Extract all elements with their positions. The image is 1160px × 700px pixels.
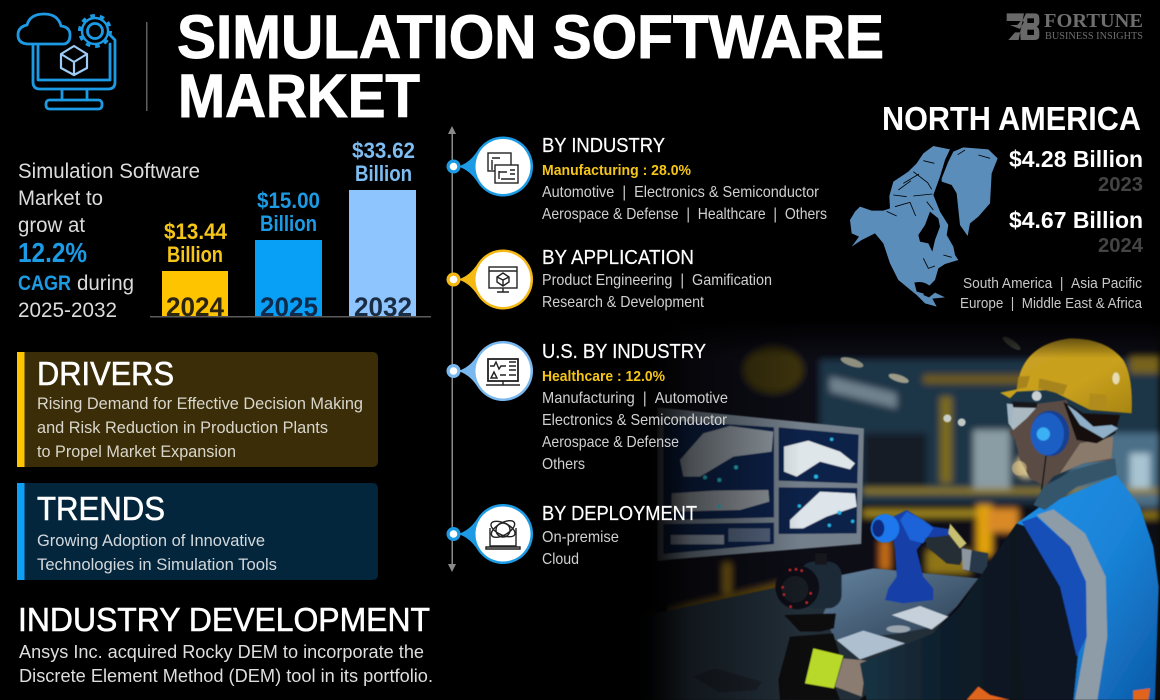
camera sensor: [775, 553, 842, 632]
text block: U.S. by industry: Healthcare : 12.0%: [542, 368, 665, 385]
icon: monitor with cloud, gear and cube: [18, 14, 115, 109]
lower glove and wrist: [778, 633, 840, 700]
header divider: [146, 22, 148, 111]
panel: trends: Growing Adoption of Innovative: [37, 531, 265, 550]
industry development: Ansys Inc. acquired Rocky DEM to incorporate the: [19, 641, 424, 662]
desk and keyboards: [640, 510, 1027, 700]
regional values: 2024: [1098, 235, 1144, 257]
industry development: Discrete Element Method (DEM) tool in its portfolio.: [19, 665, 433, 686]
segment marker: by industry: [446, 136, 533, 196]
text block: by deployment: BY DEPLOYMENT: [542, 503, 697, 525]
other regions: South America | Asia Pacific: [963, 275, 1142, 292]
text block: U.S. by industry: Aerospace & Defense: [542, 434, 679, 451]
text block: by application: BY APPLICATION: [542, 247, 694, 269]
vest: [1017, 475, 1159, 700]
panel: trends: [17, 483, 378, 580]
bar 2024: [162, 219, 228, 322]
ceiling lights: [840, 356, 864, 368]
text block: by application: [542, 247, 772, 311]
bar 2032: 2032: [354, 292, 412, 322]
jacket: [860, 520, 1027, 700]
logo: Fortune Business Insights: FORTUNE: [1044, 10, 1143, 32]
bar 2032: [349, 138, 416, 322]
head and hard hat: [1000, 338, 1132, 510]
growth text: CAGR: [18, 271, 71, 295]
text block: U.S. by industry: Others: [542, 456, 585, 473]
monitor stand: [655, 561, 667, 624]
text block: by deployment: On-premise: [542, 529, 619, 546]
icon: industrial robots: [488, 153, 518, 183]
other regions: [960, 275, 1143, 312]
panel: trends: TRENDS: [37, 490, 165, 527]
bar 2025: [255, 188, 322, 322]
segment marker: by application: [446, 250, 533, 310]
text block: U.S. by industry: Electronics & Semiconductor: [542, 412, 728, 429]
bar 2024: Billion: [167, 242, 223, 267]
segment marker: U.S. by industry: [446, 341, 533, 401]
regional values: [1009, 146, 1144, 257]
segment marker: by deployment: [446, 504, 533, 564]
text block: U.S. by industry: U.S. BY INDUSTRY: [542, 341, 706, 363]
photo: engineer at simulation workstation: [640, 320, 1160, 700]
regional values: $4.28 Billion: [1009, 146, 1143, 172]
bar 2024: $13.44: [164, 219, 228, 244]
bar chart: market size: [150, 138, 431, 322]
text block: by industry: Aerospace & Defense | Healthcare | Others: [542, 206, 827, 223]
icon: monitor with cube: [489, 267, 517, 292]
bar 2024: 2024: [166, 292, 224, 322]
bar 2032: $33.62: [352, 138, 415, 163]
text block: by deployment: Cloud: [542, 551, 579, 568]
panel: drivers: DRIVERS: [37, 355, 174, 392]
text block: by application: Research & Development: [542, 294, 704, 311]
text block: by industry: Manufacturing : 28.0%: [542, 162, 691, 179]
industry development: [18, 601, 433, 686]
panel: drivers: to Propel Market Expansion: [37, 442, 236, 461]
raised hand: [925, 535, 967, 565]
growth text: [18, 159, 200, 322]
timeline arrow: [448, 126, 456, 572]
logo: Fortune Business Insights: BUSINESS INSIGHTS: [1045, 31, 1143, 42]
industry development: INDUSTRY DEVELOPMENT: [18, 601, 430, 638]
icon: laptop with atom: [486, 517, 520, 549]
icon: dashboard monitor: [486, 359, 520, 385]
panel: drivers: [17, 352, 378, 467]
bar 2025: Billion: [260, 211, 317, 236]
logo mark: [1007, 13, 1039, 40]
text block: U.S. by industry: [542, 341, 728, 473]
growth text: Simulation Software: [18, 159, 200, 183]
panel: trends: Technologies in Simulation Tools: [37, 555, 277, 574]
text block: by deployment: [542, 503, 697, 568]
text block: by industry: Automotive | Electronics & Semiconductor: [542, 184, 820, 201]
text block: U.S. by industry: Manufacturing | Automotive: [542, 390, 728, 407]
text block: by application: Product Engineering | Gamification: [542, 272, 772, 289]
growth text: during: [77, 271, 134, 295]
bar 2025: 2025: [260, 292, 318, 322]
title: [177, 3, 884, 130]
other regions: Europe | Middle East & Africa: [960, 295, 1143, 312]
bar 2032: Billion: [355, 161, 412, 186]
growth text: 12.2%: [18, 237, 87, 268]
regional values: $4.67 Billion: [1009, 207, 1143, 233]
monitor: [657, 407, 864, 561]
map: North America: [850, 146, 998, 307]
north america heading: NORTH AMERICA: [882, 100, 1141, 137]
panel: drivers: and Risk Reduction in Production Plants: [37, 418, 328, 437]
photo fade: [630, 318, 1160, 700]
bar 2025: $15.00: [257, 188, 320, 213]
title: MARKET: [178, 62, 420, 130]
title: SIMULATION SOFTWARE: [177, 3, 884, 71]
text block: by industry: BY INDUSTRY: [542, 135, 665, 157]
logo: Fortune Business Insights: [1007, 10, 1143, 42]
text block: by industry: [542, 135, 827, 223]
growth text: 2025-2032: [18, 298, 117, 322]
robot model: [871, 510, 952, 603]
panel: drivers: Rising Demand for Effective Decision Making: [37, 394, 363, 413]
growth text: Market to: [18, 186, 103, 210]
growth text: grow at: [18, 213, 85, 237]
regional values: 2023: [1098, 174, 1143, 196]
